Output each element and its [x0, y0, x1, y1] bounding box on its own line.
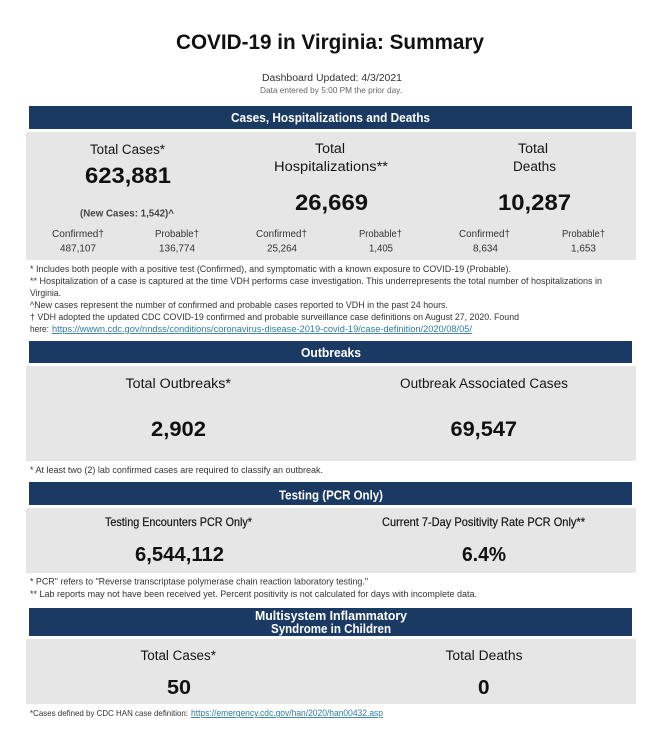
- footnotes: cases: † VDH adopted the updated CDC COVID-19 confirmed and probable surveillance case definitions on August 27, 2020. Found: [30, 312, 519, 322]
- stat: total deaths: Confirmed†: [459, 229, 510, 240]
- stat: total hospitalizations: 25,264: [267, 244, 298, 254]
- stat: MIS-C total cases: Total Cases*: [140, 648, 217, 663]
- footnote: MIS-C case definition: https://emergency.cdc.gov/han/2020/han00432.asp: [191, 708, 383, 718]
- stat: total outbreaks: 2,902: [151, 418, 206, 441]
- footnotes: cases: here:: [30, 324, 49, 334]
- stat: MIS-C total deaths: [446, 648, 523, 699]
- dashboard update info: Data entered by 5:00 PM the prior day.: [260, 85, 402, 95]
- section header: [29, 482, 632, 505]
- stat: total hospitalizations: 1,405: [369, 244, 394, 254]
- stat: total hospitalizations: Confirmed†: [256, 229, 307, 240]
- stat: total deaths: 8,634: [473, 244, 499, 254]
- stat: outbreak associated cases: 69,547: [450, 418, 517, 441]
- stat: total deaths: 10,287: [498, 190, 571, 215]
- stat: total cases: Confirmed†: [52, 229, 104, 240]
- footnote: MIS-C case definition: [30, 708, 383, 718]
- stat: outbreak associated cases: [400, 376, 568, 441]
- section: cases, hospitalizations and deaths: [26, 106, 636, 334]
- stat: MIS-C total cases: [140, 648, 217, 699]
- section header: Multisystem Inflammatory: [255, 608, 408, 623]
- stat: testing encounters: [105, 515, 252, 566]
- stat: total hospitalizations: [256, 141, 402, 254]
- stat: total cases: Total Cases*: [90, 142, 166, 157]
- panel: totals: [26, 132, 636, 260]
- section: testing: [26, 482, 636, 599]
- stat: positivity rate: 6.4%: [462, 544, 506, 566]
- stat: total cases: 623,881: [85, 163, 171, 188]
- stat: total deaths: [459, 141, 605, 254]
- section header: [29, 341, 632, 363]
- stat: total hospitalizations: Probable†: [359, 229, 402, 240]
- dashboard update info: [260, 73, 402, 95]
- footnotes: testing: * PCR" refers to "Reverse transcriptase polymerase chain reaction laboratory testing.": [30, 576, 368, 586]
- section header: Syndrome in Children: [271, 621, 391, 636]
- footnotes: cases: https://wwwn.cdc.gov/nndss/conditions/coronavirus-disease-2019-covid-19/case-definition/2020/08/05/: [52, 324, 473, 334]
- title: COVID-19 in Virginia: Summary: [176, 30, 484, 54]
- footnotes: cases: [30, 264, 602, 334]
- dashboard update info: Dashboard Updated: 4/3/2021: [262, 73, 402, 84]
- stat: total hospitalizations: Total: [315, 141, 345, 156]
- footnotes: cases: ** Hospitalization of a case is captured at the time VDH performs case investigation. This underrepresents the total number of hospitalizations in: [30, 276, 602, 286]
- panel: outbreak totals: [26, 366, 636, 461]
- stat: MIS-C total deaths: 0: [478, 677, 490, 699]
- stat: total cases: 136,774: [159, 244, 196, 254]
- section header: Testing (PCR Only): [279, 488, 383, 502]
- stat: total deaths: Total: [518, 141, 548, 156]
- stat: MIS-C total cases: 50: [167, 677, 191, 699]
- stat: MIS-C total deaths: Total Deaths: [446, 648, 523, 663]
- section header: Outbreaks: [301, 345, 361, 360]
- stat: total cases: Probable†: [155, 229, 199, 240]
- stat: testing encounters: Testing Encounters PCR Only*: [105, 515, 252, 529]
- stat: positivity rate: [382, 515, 585, 566]
- stat: total hospitalizations: 26,669: [295, 190, 368, 215]
- stat: total cases: 487,107: [60, 244, 96, 254]
- section: outbreaks: [26, 341, 636, 475]
- footnotes: cases: ^New cases represent the number of confirmed and probable cases reported to VDH in the past 24 hours.: [30, 300, 448, 310]
- stat: total deaths: Deaths: [513, 159, 556, 174]
- stat: testing encounters: 6,544,112: [135, 544, 224, 566]
- stat: positivity rate: Current 7-Day Positivity Rate PCR Only**: [382, 515, 585, 529]
- footnotes: cases: Virginia.: [30, 288, 61, 298]
- panel: MIS-C totals: [26, 639, 636, 704]
- stat: total outbreaks: [126, 376, 232, 441]
- stat: total cases: [52, 142, 199, 254]
- footnote: MIS-C case definition: *Cases defined by CDC HAN case definition:: [30, 708, 188, 718]
- section header: [29, 608, 632, 636]
- section header: Cases, Hospitalizations and Deaths: [231, 110, 430, 125]
- stat: total hospitalizations: Hospitalizations**: [274, 159, 389, 174]
- stat: total deaths: 1,653: [571, 244, 597, 254]
- section header: [29, 106, 632, 129]
- footnotes: cases: * Includes both people with a positive test (Confirmed), and symptomatic with a known exposure to COVID-19 (Probable).: [30, 264, 511, 274]
- stat: total deaths: Probable†: [562, 229, 605, 240]
- stat: total cases: (New Cases: 1,542)^: [80, 208, 174, 220]
- footnotes: testing: [30, 576, 477, 599]
- stat: outbreak associated cases: Outbreak Associated Cases: [400, 376, 568, 391]
- panel: testing totals: [26, 508, 636, 573]
- section: multisystem inflammatory syndrome in children: [26, 608, 636, 718]
- footnotes: testing: ** Lab reports may not have been received yet. Percent positivity is not calculated for days with incomplete data.: [30, 589, 477, 599]
- footnote: outbreaks: * At least two (2) lab confirmed cases are required to classify an outbreak.: [30, 465, 323, 475]
- stat: total outbreaks: Total Outbreaks*: [126, 376, 232, 391]
